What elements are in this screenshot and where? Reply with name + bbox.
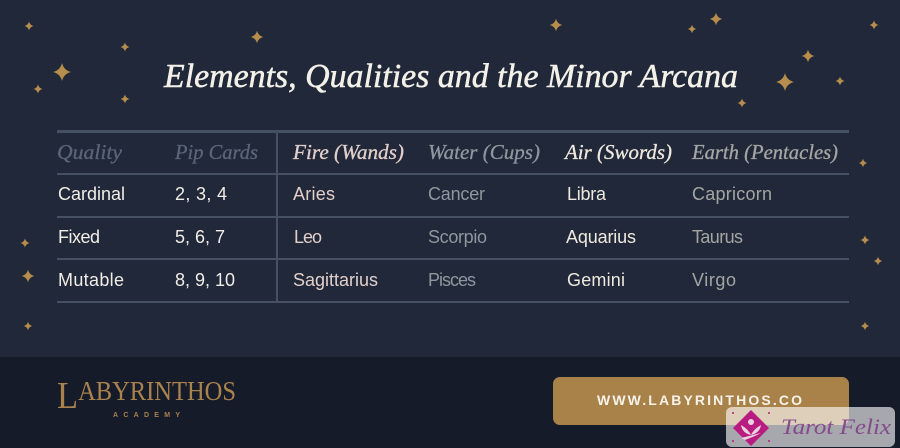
button: WWW.LABYRINTHOS.CO (597, 392, 802, 408)
table row: cardinal (58, 184, 772, 204)
table (57, 130, 849, 303)
table header: Air (Swords) (563, 140, 672, 164)
table row: cardinal: Aries (293, 184, 335, 204)
table row: mutable: Sagittarius (293, 270, 378, 290)
stars (20, 13, 882, 330)
button (553, 377, 849, 425)
icon: lotus diamond (732, 410, 770, 446)
table row: fixed: Leo (294, 227, 322, 247)
table row: cardinal: Capricorn (692, 184, 772, 204)
table header: Pip Cards (174, 140, 258, 164)
table row: cardinal: 2, 3, 4 (175, 184, 227, 204)
logo (57, 375, 236, 419)
table row: fixed: Fixed (58, 227, 100, 247)
title: Elements, Qualities and the Minor Arcana (163, 58, 738, 95)
table row: mutable: Gemini (567, 270, 625, 290)
table row: mutable: Pisces (428, 270, 476, 290)
watermark: Tarot Felix (781, 414, 891, 439)
logo: ACADEMY (113, 412, 180, 419)
table header: Quality (57, 140, 123, 164)
table row: fixed: Aquarius (566, 227, 636, 247)
table row: mutable (58, 270, 736, 290)
table row: fixed (58, 227, 743, 247)
table row: fixed: 5, 6, 7 (175, 227, 225, 247)
table header (57, 140, 838, 164)
table row: mutable: Virgo (692, 270, 736, 290)
table row: mutable: Mutable (58, 270, 124, 290)
table header: Water (Cups) (428, 140, 540, 164)
table row: cardinal: Libra (567, 184, 607, 204)
table row: fixed: Scorpio (428, 227, 487, 247)
watermark (726, 407, 895, 447)
table header: Fire (Wands) (292, 140, 404, 164)
logo: L (57, 375, 78, 417)
logo: ABYRINTHOS (78, 376, 236, 406)
footer band (0, 357, 900, 448)
table header: Earth (Pentacles) (691, 140, 838, 164)
table row: mutable: 8, 9, 10 (175, 270, 235, 290)
table row: cardinal: Cancer (428, 184, 485, 204)
table row: fixed: Taurus (692, 227, 743, 247)
table row: cardinal: Cardinal (58, 184, 125, 204)
